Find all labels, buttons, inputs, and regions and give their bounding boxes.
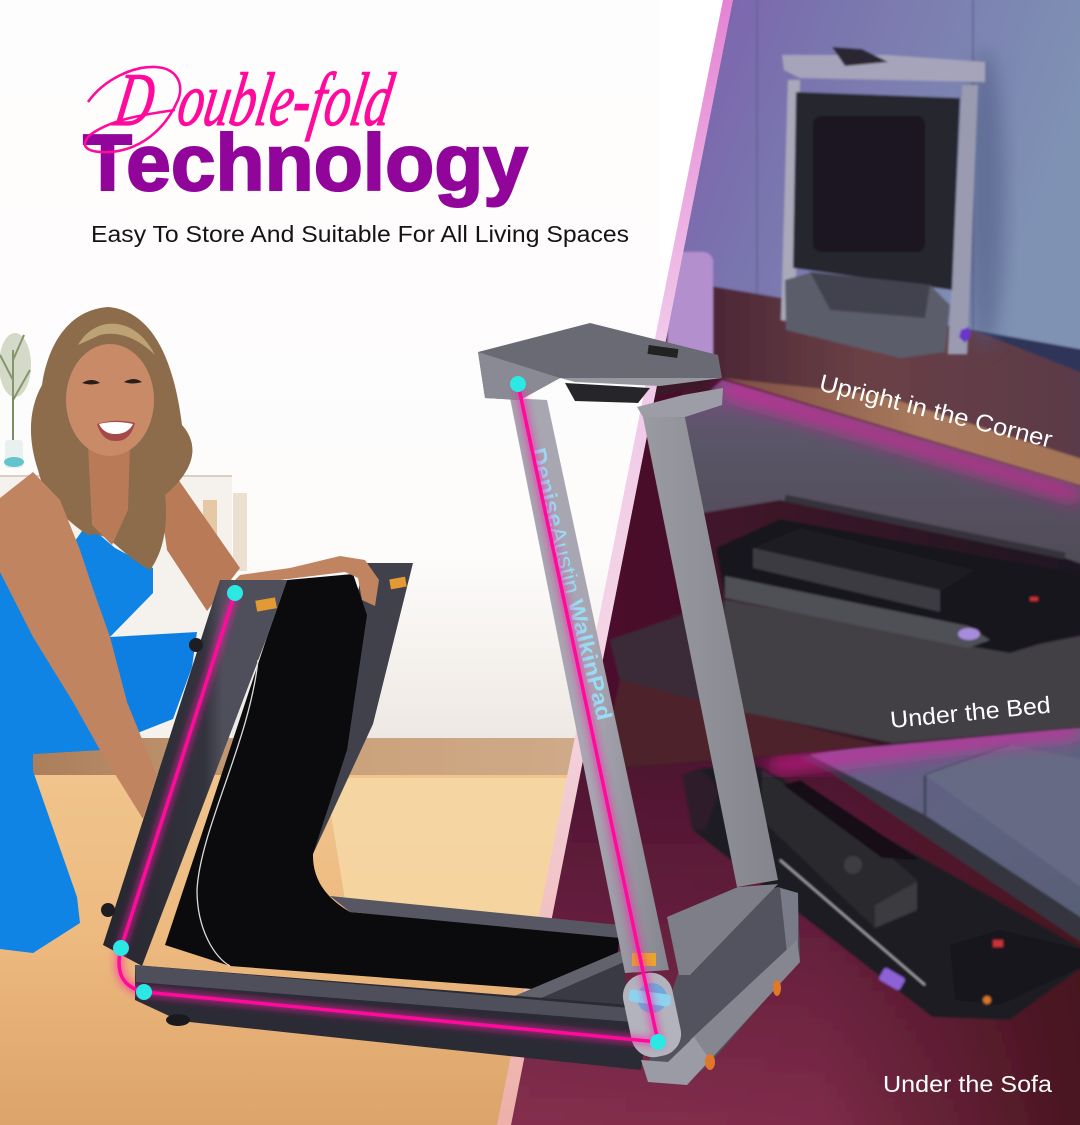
panel: under the sofa — [490, 727, 1080, 1125]
subtitle: Easy To Store And Suitable For All Living Spaces — [91, 221, 629, 247]
ramp — [518, 953, 628, 1010]
callout: magenta fold lines with cyan nodes — [113, 376, 666, 1050]
image: folded treadmill upright — [781, 47, 1005, 358]
neck — [88, 445, 130, 545]
far deck rail — [330, 896, 620, 938]
far post — [643, 408, 778, 887]
image: treadmill under the bed — [716, 519, 1080, 653]
label: under the sofa: Under the Sofa — [883, 1071, 1052, 1097]
face — [66, 344, 154, 456]
housing — [645, 887, 800, 1083]
divider: pink diagonal edge — [497, 0, 733, 1125]
image: folding treadmill — [101, 556, 645, 1070]
heading: script title: Double-fold — [108, 58, 399, 142]
near post — [510, 398, 669, 973]
image: treadmill upright frame — [478, 323, 800, 1085]
arm on deck — [225, 556, 379, 606]
image: sofa — [800, 727, 1080, 945]
near arm — [0, 472, 157, 819]
image: woman — [0, 307, 240, 953]
far rail — [313, 563, 413, 854]
near rail — [103, 580, 287, 966]
brand lettering on post: Denise Austin WalkinPad — [525, 445, 617, 723]
label: under the bed: Under the Bed — [889, 692, 1052, 733]
callout: bed scene glow — [722, 388, 1080, 496]
image: treadmill under the sofa — [682, 766, 1080, 1020]
handlebar — [478, 323, 722, 400]
heading: Technology: Technology — [83, 118, 529, 207]
belt — [165, 574, 620, 995]
panel: right scenes — [480, 0, 1080, 1125]
callout: sofa scene glow — [770, 730, 1080, 766]
foot cap — [641, 1037, 710, 1085]
hair — [31, 307, 192, 570]
blue thigh — [33, 632, 197, 754]
far arm — [160, 472, 240, 611]
panel: upright in the corner — [640, 0, 1080, 487]
icon: potted plant — [0, 333, 31, 468]
panel: under the bed — [570, 378, 1080, 770]
side plate — [619, 969, 685, 1061]
blue body and leg — [0, 524, 153, 953]
label: upright in the corner: Upright in the Corner — [817, 370, 1055, 454]
front deck — [135, 965, 645, 1070]
